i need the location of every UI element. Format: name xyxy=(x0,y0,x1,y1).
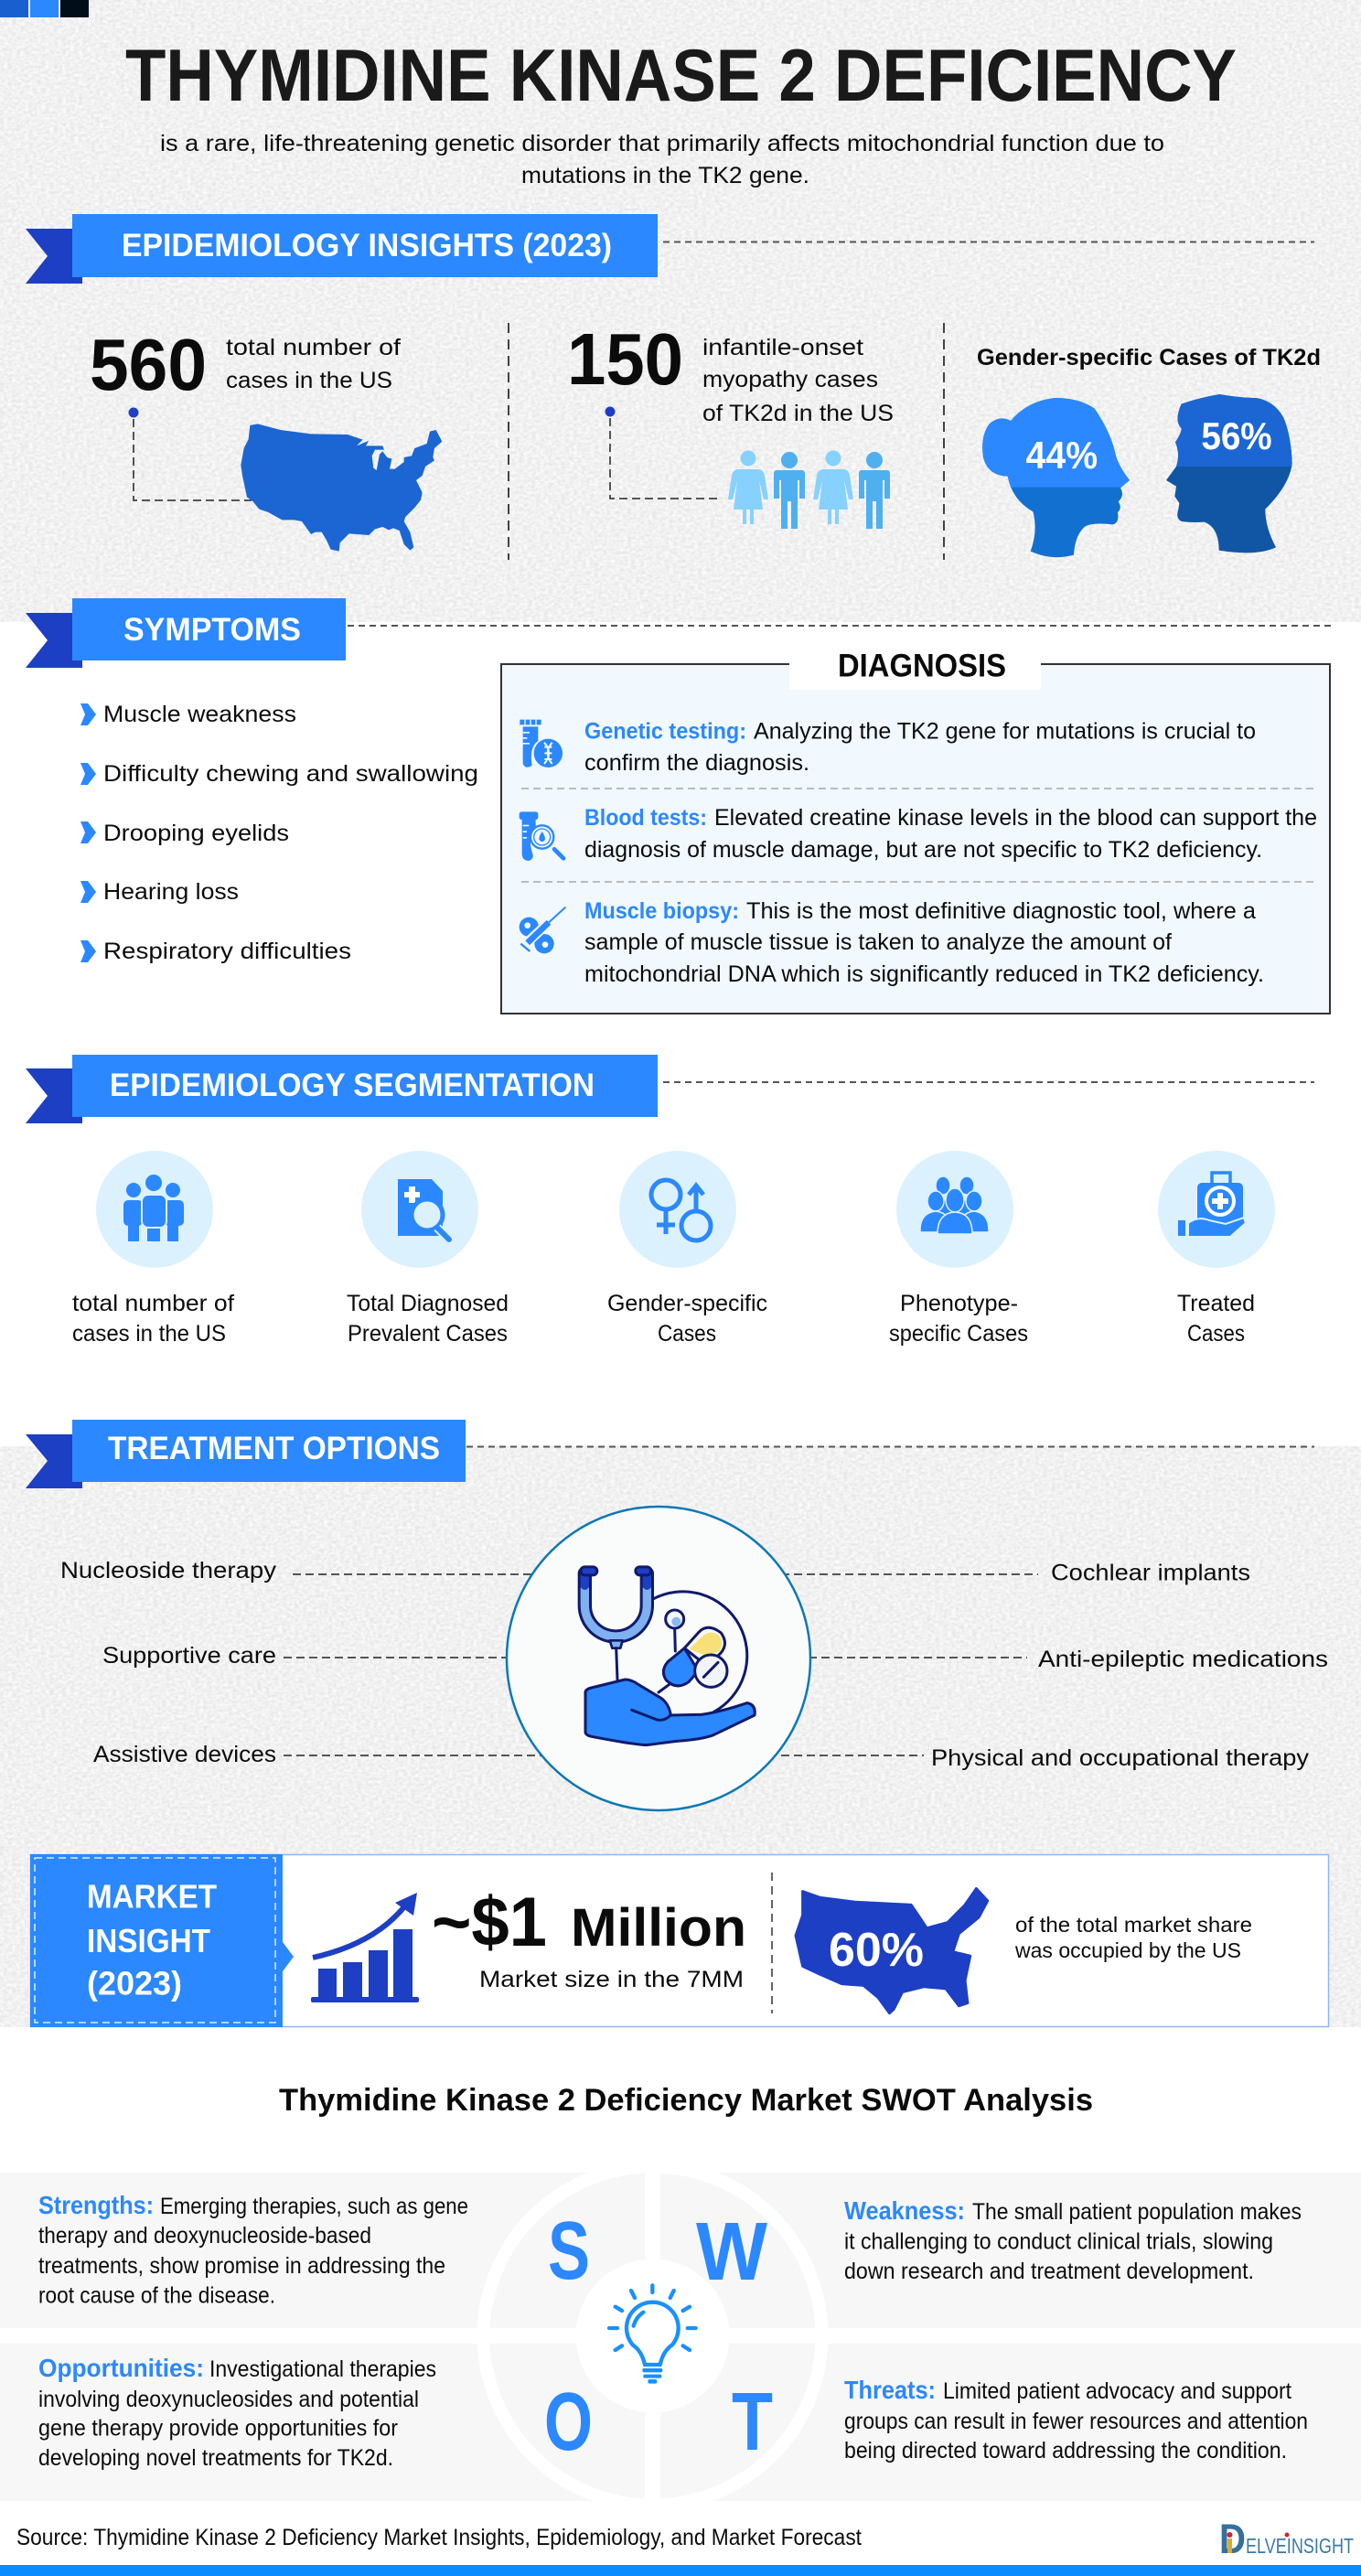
segment: total diagnosed prevalent cases xyxy=(347,1151,509,1347)
segment: total diagnosed prevalent cases: Prevalent Cases xyxy=(348,1321,508,1347)
source line: Source: Thymidine Kinase 2 Deficiency Market Insights, Epidemiology, and Market Forecast xyxy=(16,2525,862,2550)
icon: muscle biopsy xyxy=(520,907,565,953)
icon: female head 44% xyxy=(982,398,1130,557)
text: strengths: therapy and deoxynucleoside-based xyxy=(38,2223,371,2249)
treatment labels left: Supportive care xyxy=(102,1643,276,1669)
background: paper texture top xyxy=(0,0,1361,622)
text: muscle biopsy: Muscle biopsy: xyxy=(584,898,739,924)
symptoms list: Hearing loss xyxy=(103,879,239,905)
segment: gender-specific cases: Gender-specific xyxy=(607,1291,767,1316)
segment: total diagnosed prevalent cases: Total Diagnosed xyxy=(347,1291,509,1316)
SWOT letters: W xyxy=(696,2206,767,2298)
icon: male head 56% xyxy=(1166,394,1292,553)
segment: gender-specific cases: Cases xyxy=(658,1321,716,1347)
text: genetic testing: Analyzing the TK2 gene for mutations is crucial to xyxy=(754,719,1256,745)
icon: female head 44%: 44% xyxy=(1026,434,1098,477)
text: weakness: The small patient population makes xyxy=(972,2199,1302,2225)
text: opportunities xyxy=(38,2354,436,2471)
section header: symptoms xyxy=(26,598,1331,668)
text: opportunities: Opportunities: xyxy=(38,2354,204,2382)
section header: treatment options xyxy=(26,1420,1314,1488)
segment: total number of cases xyxy=(72,1151,234,1347)
symptoms list: Muscle weakness xyxy=(103,702,296,727)
market size: Million xyxy=(571,1898,746,1958)
section header: epidemiology segmentation: EPIDEMIOLOGY SEGMENTATION xyxy=(110,1068,595,1103)
market share text: was occupied by the US xyxy=(1014,1938,1241,1962)
market insight label: INSIGHT xyxy=(87,1922,210,1959)
segment: gender-specific cases xyxy=(607,1151,767,1347)
corner squares xyxy=(0,0,89,17)
text: weakness: down research and treatment development. xyxy=(844,2259,1254,2284)
SWOT letters: T xyxy=(732,2377,773,2468)
text: opportunities: developing novel treatments for TK2d. xyxy=(38,2445,393,2471)
segment: phenotype-specific cases: specific Cases xyxy=(889,1321,1028,1347)
text: blood tests: Blood tests: xyxy=(584,805,707,831)
text: threats: being directed toward addressing the condition. xyxy=(844,2438,1287,2463)
symptoms list: Drooping eyelids xyxy=(103,821,289,846)
market share text xyxy=(1014,1913,1252,1962)
stat: 560 total cases xyxy=(90,324,401,500)
leader lines xyxy=(284,1574,1038,1755)
icon: stethoscope, hand and pills xyxy=(584,1571,755,1745)
stat: 150 infantile-onset xyxy=(567,318,894,499)
stat: 560 total cases: cases in the US xyxy=(226,368,392,393)
bottom bar xyxy=(0,2565,1361,2576)
text: muscle biopsy: sample of muscle tissue is taken to analyze the amount of xyxy=(584,929,1172,955)
segment: treated cases: Cases xyxy=(1187,1321,1245,1347)
symptoms list: Respiratory difficulties xyxy=(103,939,351,964)
icon: genetic testing xyxy=(520,720,563,767)
segment: total number of cases: total number of xyxy=(72,1291,234,1316)
text: threats: Threats: xyxy=(844,2376,936,2404)
text: strengths: root cause of the disease. xyxy=(38,2283,275,2309)
market share text: of the total market share xyxy=(1015,1913,1252,1937)
segment: treated cases xyxy=(1158,1151,1275,1347)
icon: US map 60% xyxy=(796,1889,988,2013)
market insight label: MARKET xyxy=(87,1877,217,1916)
SWOT letters xyxy=(544,2206,773,2468)
segment: treated cases: Treated xyxy=(1177,1291,1255,1316)
stat: 150 infantile-onset: 150 xyxy=(567,318,683,400)
stat: 560 total cases: 560 xyxy=(90,324,207,405)
heading: gender-specific: Gender-specific Cases of TK2d xyxy=(977,345,1321,370)
text: blood tests: Elevated creatine kinase levels in the blood can support the xyxy=(714,805,1317,831)
icon: blood tests xyxy=(520,811,563,861)
icon: four people xyxy=(728,450,890,529)
segment: total number of cases: cases in the US xyxy=(72,1321,226,1347)
symptoms list: Difficulty chewing and swallowing xyxy=(103,761,478,787)
stat: 150 infantile-onset: of TK2d in the US xyxy=(702,401,894,426)
subtitle: mutations in the TK2 gene. xyxy=(521,163,809,188)
market size xyxy=(432,1884,746,1992)
subtitle xyxy=(160,131,1164,188)
icon: light bulb xyxy=(609,2285,696,2384)
text: genetic testing: confirm the diagnosis. xyxy=(584,750,809,776)
treatment labels left: Nucleoside therapy xyxy=(60,1558,277,1583)
text: opportunities: gene therapy provide opportunities for xyxy=(38,2415,398,2441)
text: opportunities: Investigational therapies xyxy=(209,2356,436,2382)
subtitle: is a rare, life-threatening genetic disorder that primarily affects mitochondrial function due to xyxy=(160,131,1164,156)
text: strengths: treatments, show promise in addressing the xyxy=(38,2253,445,2279)
text: threats: Limited patient advocacy and support xyxy=(943,2378,1291,2404)
logo: DelveInsight xyxy=(1219,2516,1354,2562)
text: muscle biopsy: This is the most definitive diagnostic tool, where a xyxy=(746,898,1256,924)
treatment labels right xyxy=(931,1561,1328,1771)
text: strengths xyxy=(38,2191,468,2309)
heading: diagnosis: DIAGNOSIS xyxy=(838,648,1006,684)
panel: market insight xyxy=(30,1854,1328,2027)
treatment circle xyxy=(507,1507,810,1810)
stat: 150 infantile-onset: myopathy cases xyxy=(702,367,878,392)
heading: SWOT analysis: Thymidine Kinase 2 Deficiency Market SWOT Analysis xyxy=(279,2083,1093,2118)
section header: epidemiology insights: EPIDEMIOLOGY INSIGHTS (2023) xyxy=(122,228,612,263)
section header: treatment options: TREATMENT OPTIONS xyxy=(108,1431,440,1466)
stat: 150 infantile-onset: infantile-onset xyxy=(702,335,863,360)
section header: symptoms: SYMPTOMS xyxy=(123,612,301,648)
SWOT background panels xyxy=(0,2166,1361,2505)
text: genetic testing: Genetic testing: xyxy=(584,719,746,745)
market insight label: (2023) xyxy=(87,1965,182,2002)
treatment labels left: Assistive devices xyxy=(93,1742,276,1767)
segment: phenotype-specific cases: Phenotype- xyxy=(900,1291,1018,1316)
title: THYMIDINE KINASE 2 DEFICIENCY xyxy=(125,35,1237,117)
treatment labels right: Anti-epileptic medications xyxy=(1038,1647,1328,1672)
section header: epidemiology segmentation xyxy=(26,1055,1314,1123)
text: weakness xyxy=(844,2196,1302,2284)
text: muscle biopsy: mitochondrial DNA which is significantly reduced in TK2 deficiency. xyxy=(584,961,1264,987)
icon: US map xyxy=(241,424,442,552)
stat: 560 total cases: total number of xyxy=(226,335,401,360)
icon: growth chart xyxy=(311,1893,419,2002)
text: threats xyxy=(844,2376,1308,2463)
symptoms list xyxy=(80,702,478,964)
icon: US map 60%: 60% xyxy=(829,1924,924,1977)
text: threats: groups can result in fewer resources and attention xyxy=(844,2409,1308,2434)
divider xyxy=(943,323,945,560)
text: blood tests xyxy=(584,805,1317,863)
SWOT letters: O xyxy=(544,2377,593,2468)
background: paper texture treatment xyxy=(0,1446,1361,2027)
market size: Market size in the 7MM xyxy=(479,1967,744,1992)
segment: phenotype-specific cases xyxy=(889,1151,1028,1347)
market size: ~$1 xyxy=(432,1884,547,1961)
text: weakness: it challenging to conduct clinical trials, slowing xyxy=(844,2228,1273,2254)
icon: male head 56%: 56% xyxy=(1201,414,1272,457)
text: blood tests: diagnosis of muscle damage, but are not specific to TK2 deficiency. xyxy=(584,837,1262,863)
treatment labels right: Cochlear implants xyxy=(1051,1561,1250,1586)
panel: diagnosis xyxy=(501,648,1330,1014)
text: genetic testing xyxy=(584,719,1256,776)
text: weakness: Weakness: xyxy=(844,2196,965,2225)
treatment labels right: Physical and occupational therapy xyxy=(931,1745,1310,1771)
text: strengths: Emerging therapies, such as gene xyxy=(160,2194,468,2219)
treatment labels left xyxy=(60,1558,277,1767)
logo: DelveInsight: D xyxy=(1219,2516,1246,2562)
market insight label xyxy=(87,1877,217,2002)
text: strengths: Strengths: xyxy=(38,2191,154,2219)
SWOT letters: S xyxy=(548,2206,590,2297)
text: opportunities: involving deoxynucleosides and potential xyxy=(38,2387,419,2412)
text: muscle biopsy xyxy=(584,898,1264,987)
divider xyxy=(508,323,509,560)
section header: epidemiology insights xyxy=(26,214,1314,284)
